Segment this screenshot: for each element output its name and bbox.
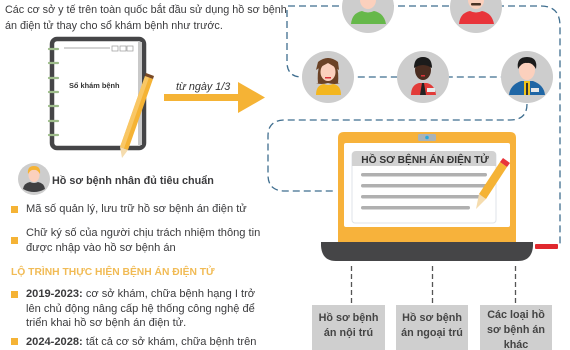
icon: laptop (321, 132, 533, 261)
icon: woman with headset (302, 51, 354, 103)
roadmap item 2019-2023: lên chủ động nâng cấp hệ thống công nghệ để (26, 302, 255, 314)
box: inpatient records (312, 305, 385, 350)
icon: pencil (120, 73, 154, 158)
icon: notebook (49, 39, 144, 148)
roadmap item 2019-2023: triển khai hồ sơ bệnh án điện tử. (26, 317, 186, 329)
box: other records: sơ bệnh án (487, 324, 545, 336)
notebook label: Sổ khám bệnh (69, 81, 120, 90)
bullet 1: Mã số quản lý, lưu trữ hồ sơ bệnh án điện tử (26, 203, 247, 215)
heading: roadmap: LỘ TRÌNH THỰC HIỆN BỆNH ÁN ĐIỆN TỬ (11, 267, 215, 278)
box: outpatient records (396, 305, 468, 350)
roadmap item 2019-2023: 2019-2023: cơ sở khám, chữa bệnh hạng I trở (26, 288, 255, 300)
bullet 2 (11, 227, 260, 254)
arrow: from paper to electronic (164, 82, 265, 113)
bullet 2: được nhập vào hồ sơ bệnh án (26, 242, 176, 254)
icon: patient avatar (18, 163, 50, 195)
icon: person green (342, 0, 394, 33)
dashed lines to boxes (352, 266, 516, 304)
box: outpatient records: án ngoại trú (401, 327, 463, 339)
intro text: án điện tử thay cho sổ khám bệnh như trước. (5, 20, 223, 32)
dashed connector (268, 6, 560, 245)
cable (535, 244, 558, 249)
roadmap item 2024-2028: 2024-2028: tất cả cơ sở khám, chữa bệnh trên (26, 336, 256, 348)
box: other records: Các loại hồ (487, 309, 545, 321)
arrow label: từ ngày 1/3 (176, 81, 230, 93)
laptop title: HỒ SƠ BỆNH ÁN ĐIỆN TỬ (361, 153, 489, 166)
box: outpatient records: Hồ sơ bệnh (402, 312, 462, 324)
box: inpatient records: án nội trú (324, 327, 373, 339)
intro text (5, 3, 287, 32)
icon: man in red shirt (397, 51, 449, 103)
icon: person red moustache (450, 0, 502, 33)
icon: man in blue suit (501, 51, 553, 103)
intro text: Các cơ sở y tế trên toàn quốc bắt đầu sử dụng hồ sơ bệnh (5, 4, 287, 16)
bullet 2: Chữ ký số của người chịu trách nhiệm thông tin (26, 227, 260, 239)
box: other records (480, 305, 552, 350)
box: inpatient records: Hồ sơ bệnh (319, 312, 378, 324)
roadmap item 2019-2023 (11, 288, 255, 329)
heading: eligible records: Hồ sơ bệnh nhân đủ tiêu chuẩn (52, 175, 214, 187)
